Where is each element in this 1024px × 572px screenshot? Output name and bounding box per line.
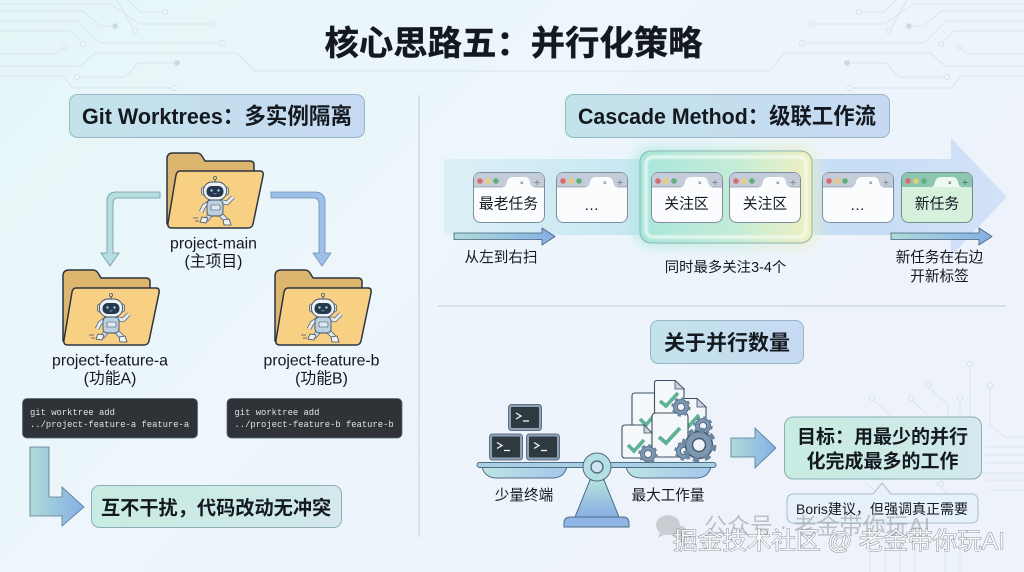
code block: feature b: ../project-feature-b feature-b <box>234 420 394 430</box>
icon: documents and gears <box>622 380 714 462</box>
watermark: account name: 公众号 · 老金带你玩AI <box>704 513 930 539</box>
title: 核心思路五：并行化策略 <box>324 25 702 63</box>
heading: parallel count: 关于并行数量 <box>664 332 790 355</box>
arrow: main to feature a <box>101 192 160 266</box>
icon: wechat bubbles <box>656 515 687 538</box>
browser tab: ellipsis: … <box>584 197 599 214</box>
label: new tabs: 新任务在右边 <box>896 250 983 266</box>
heading: git worktrees <box>70 94 364 138</box>
label: project-feature-a: project-feature-a <box>52 352 168 370</box>
heading: cascade method: Cascade Method：级联工作流 <box>578 104 876 129</box>
flow band arrow <box>444 138 1007 256</box>
heading: cascade method <box>566 94 890 138</box>
browser tab: focus zone 2 <box>730 172 800 222</box>
note: boris suggestion <box>787 483 978 523</box>
label: project-main: (主项目) <box>185 252 242 270</box>
code block: feature a <box>22 398 198 438</box>
browser tab: oldest task <box>474 172 544 222</box>
arrow: to goal <box>731 428 776 468</box>
callout: goal: 化完成最多的工作 <box>806 450 959 472</box>
code block: feature a: ../project-feature-a feature-a <box>30 420 190 430</box>
code block: feature b <box>227 398 402 438</box>
icon: main folder with robot <box>167 153 263 228</box>
label: project-main: project-main <box>170 236 257 252</box>
browser tab: focus zone 1: 关注区 <box>664 196 709 212</box>
panel: git worktrees <box>22 94 402 528</box>
icon: feature a folder with robot <box>63 270 159 345</box>
label: focus limit: 同时最多关注3-4个 <box>665 259 786 276</box>
watermark: platform credit: 掘金技术社区 @ 老金带你玩AI <box>673 528 1005 555</box>
browser tab: ellipsis <box>822 172 894 222</box>
label: project-feature-b: (功能B) <box>295 370 348 388</box>
heading: git worktrees: Git Worktrees：多实例隔离 <box>82 103 352 129</box>
browser tab: ellipsis <box>556 172 628 222</box>
code block: feature a: git worktree add <box>30 408 115 418</box>
heading: parallel count <box>650 320 804 364</box>
scale balance <box>477 453 716 527</box>
arrow: left to right scan <box>454 228 555 245</box>
focus glow and box <box>636 148 816 246</box>
label: project-feature-b: project-feature-b <box>264 352 379 370</box>
panel: parallel count <box>477 320 982 527</box>
callout: goal <box>784 417 982 479</box>
browser tab: ellipsis: … <box>850 197 865 214</box>
watermark <box>656 513 1005 555</box>
icon: feature b folder with robot <box>275 270 371 345</box>
browser tab: new task <box>902 172 972 222</box>
arrow: result <box>30 447 84 526</box>
label: max workload: 最大工作量 <box>632 487 704 504</box>
browser tab: oldest task: 最老任务 <box>479 196 538 212</box>
callout: no interference: 互不干扰，代码改动无冲突 <box>101 496 331 520</box>
browser tab: focus zone 1 <box>652 172 722 222</box>
label: few terminals: 少量终端 <box>495 487 553 504</box>
label: project-feature-a: (功能A) <box>84 370 136 388</box>
label: new tabs: 开新标签 <box>910 268 969 285</box>
note: boris suggestion: Boris建议，但强调真正需要 <box>796 501 968 517</box>
arrow: main to feature b <box>271 192 331 266</box>
browser tab: focus zone 2: 关注区 <box>743 196 787 212</box>
callout: no interference <box>92 486 342 528</box>
label: scan direction: 从左到右扫 <box>465 249 537 266</box>
browser tab: new task: 新任务 <box>915 196 959 212</box>
panel: cascade method <box>444 94 1007 285</box>
icon: terminals <box>490 404 560 460</box>
callout: goal: 目标：用最少的并行 <box>797 425 968 448</box>
code block: feature b: git worktree add <box>234 408 319 418</box>
arrow: new tasks on the right <box>891 228 992 245</box>
